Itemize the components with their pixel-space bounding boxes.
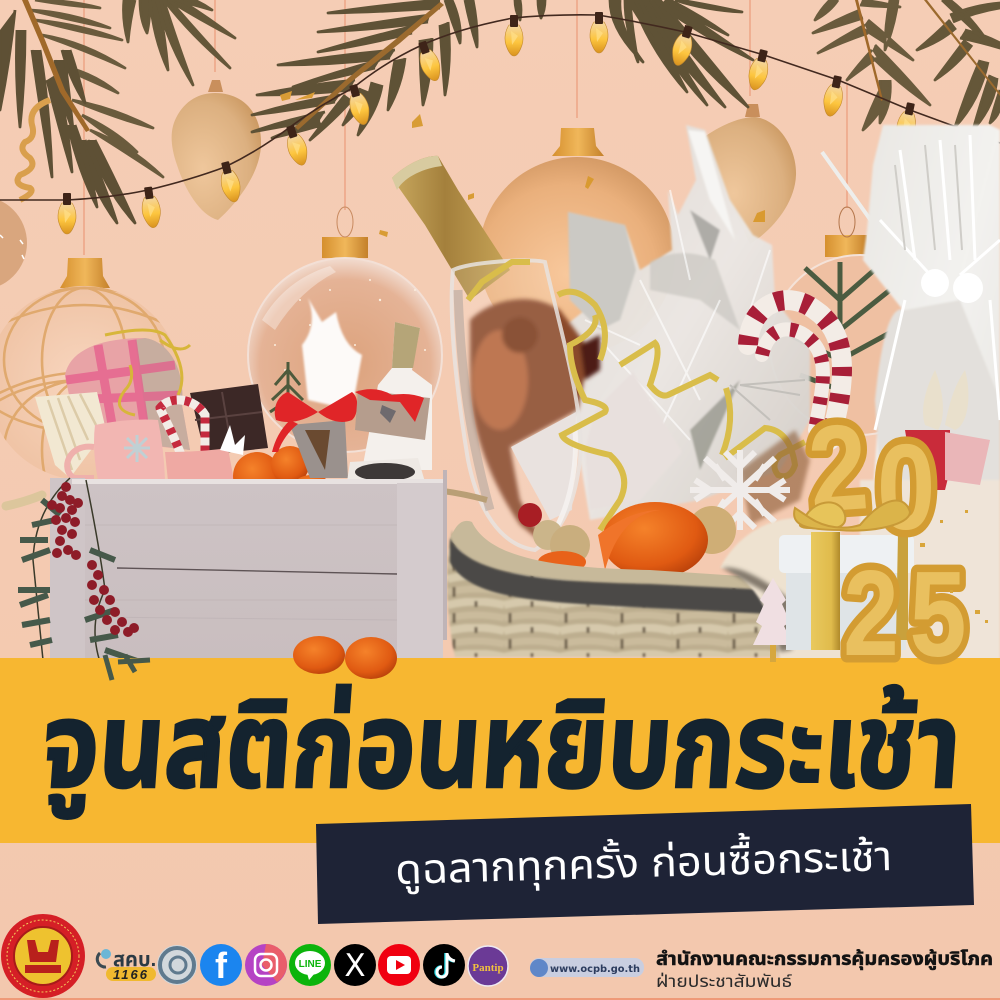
- white paper star: [220, 425, 245, 455]
- footer icon: X: X: [344, 948, 366, 984]
- candy cane large: [748, 300, 842, 440]
- clear mini bag with glitter reindeer: [290, 420, 348, 478]
- small fir in globe: [270, 362, 305, 420]
- branch: top left: [0, 0, 163, 223]
- footer logo: hotline 1166: 1166: [113, 967, 149, 982]
- pink mug: [67, 420, 165, 480]
- tea bag: [347, 458, 425, 482]
- subtitle text: ดูฉลากทุกครั้ง ก่อนซื้อกระเช้า: [394, 828, 893, 895]
- footer website pill: [530, 958, 644, 977]
- branch: top right: [813, 0, 930, 130]
- white gift tag behind glasses: [585, 372, 682, 510]
- snowflake decoration: [690, 430, 810, 530]
- toy christmas tree: [753, 578, 793, 662]
- footer icon: X: [334, 944, 376, 986]
- champagne bottle: [392, 156, 600, 545]
- branch: top centre-left: [124, 0, 235, 85]
- footer organisation name: สำนักงานคณะกรรมการคุ้มครองผู้บริโภค: [656, 948, 993, 970]
- footer logo: hotline 1166: [97, 949, 156, 982]
- cream waffle towel: [35, 392, 106, 478]
- dark chocolate bar: [190, 384, 268, 455]
- yellow banner: [0, 658, 1000, 843]
- wicker basket: [447, 521, 790, 657]
- small candy cane: [160, 400, 205, 460]
- branch: top centre: [252, 0, 477, 140]
- gift tag: [355, 389, 430, 440]
- gold curly ribbons: [468, 262, 805, 530]
- confetti pieces: [280, 91, 474, 237]
- footer department name: ฝ่ายประชาสัมพันธ์: [656, 972, 792, 991]
- rope handle left: [6, 495, 42, 506]
- basket oranges and gold baubles: [538, 502, 736, 578]
- ornament: bronze teardrop right: [700, 104, 796, 244]
- ornament: clear bauble right: [770, 207, 950, 435]
- branch: far right: [917, 0, 1000, 130]
- red berry clusters: [47, 482, 139, 637]
- gold sparkles: [920, 510, 988, 623]
- footer organisation name: [656, 948, 993, 991]
- fir garland: [18, 478, 140, 675]
- champagne flute: [452, 260, 581, 550]
- cellophane wrap right: [822, 125, 1000, 660]
- ornament hanging strings: [84, 0, 847, 255]
- gold ribbon on blanket: [105, 330, 190, 415]
- footer icon: LINE: [289, 944, 331, 986]
- ornament: gold bauble centre: [479, 128, 675, 353]
- red bow: [272, 392, 357, 452]
- gold bow on gift: [794, 501, 910, 531]
- year 2025 balloon numerals: 2: [843, 545, 899, 681]
- footer website pill: www.ocpb.go.th: [550, 964, 640, 975]
- branch: top centre-right: [515, 0, 753, 107]
- footer icon: facebook: f: [215, 945, 228, 986]
- year 2025 balloon numerals: 2: [804, 399, 872, 539]
- year 2025 balloon numerals: 5: [910, 546, 966, 682]
- footer icon: grey CPB: [157, 945, 197, 985]
- year 2025 balloon numerals: 0: [877, 420, 935, 556]
- footer icon: Pantip: Pantip: [472, 962, 504, 974]
- ornament: clear snow globe bauble: [248, 207, 442, 452]
- pink bowl: [165, 448, 234, 481]
- curly gold streamer left: [18, 100, 50, 200]
- mini sparkling bottle: [362, 322, 432, 470]
- tangerines on banner: [293, 636, 397, 679]
- footer icon: facebook: [200, 944, 242, 986]
- footer icon: TikTok: [423, 944, 465, 986]
- wooden crate: [50, 470, 447, 666]
- ornament: bronze teardrop left: [172, 80, 261, 220]
- pine branches: [0, 0, 1000, 223]
- bottom edge line: [0, 998, 1000, 1000]
- tangerines: [233, 446, 329, 500]
- string of lights: [0, 12, 1000, 234]
- navy subtitle panel: [316, 804, 974, 924]
- footer icon: instagram: [245, 944, 287, 986]
- cellophane wrap centre: [560, 125, 810, 520]
- footer icon: LINE: LINE: [299, 959, 322, 970]
- footer icon: YouTube: [378, 944, 420, 986]
- white feather paper in globe: [302, 298, 362, 410]
- footer logo: OCPB seal: [1, 914, 85, 998]
- footer icon: Pantip: [468, 946, 508, 986]
- pink plaid blanket: [65, 338, 190, 450]
- ornament: lattice bauble: [0, 258, 180, 479]
- cream blanket: [720, 518, 860, 660]
- rope handle right: [443, 491, 487, 500]
- garland tips over banner: [105, 655, 150, 680]
- wooden crate contents: [35, 322, 432, 500]
- gift box with gold bow: [779, 532, 914, 650]
- year 2025 balloon numerals: [804, 399, 966, 682]
- footer logo: hotline 1166: สคบ.: [113, 949, 156, 971]
- ornament: left partial bauble: [0, 196, 27, 290]
